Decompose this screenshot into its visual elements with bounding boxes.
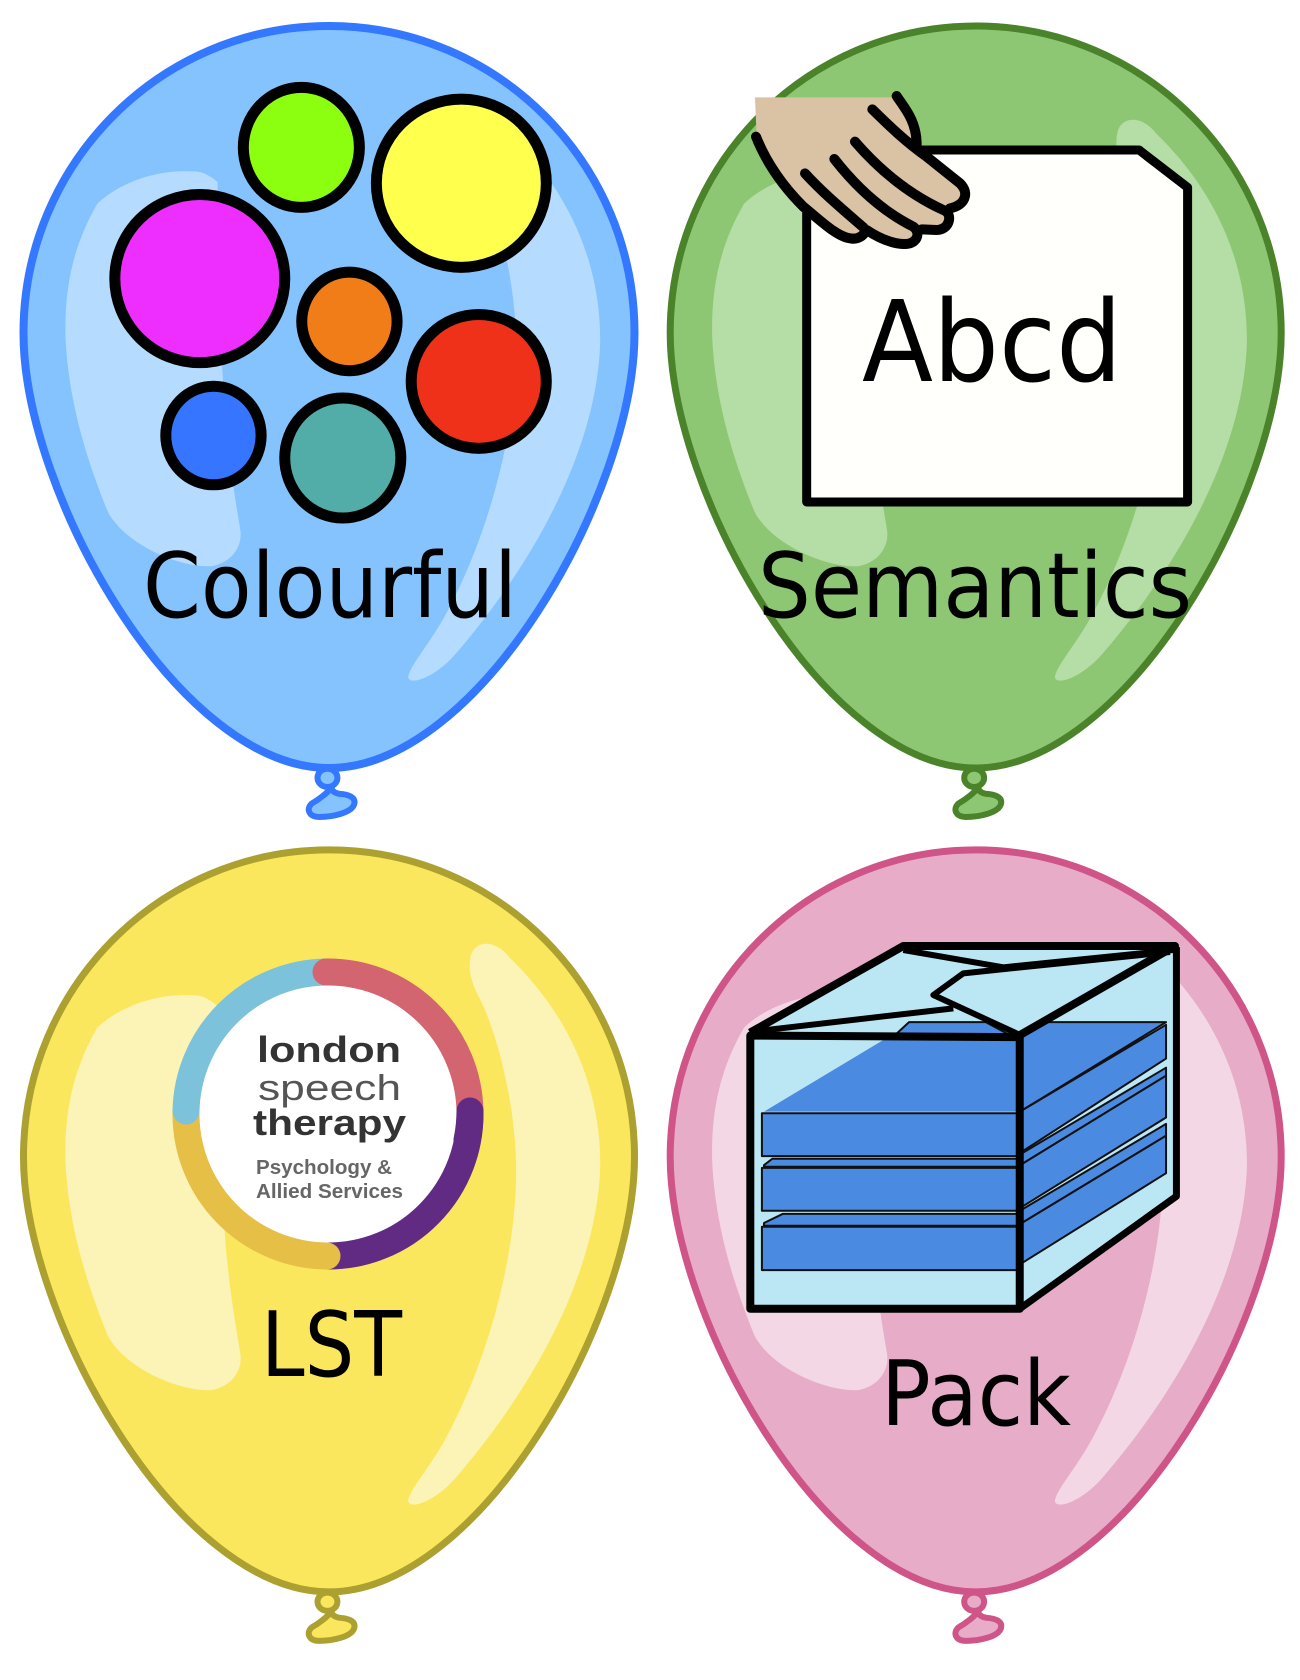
balloon: Colourful [24,26,634,817]
logo: london speech therapy: Allied Services [256,1181,403,1203]
balloon: Semantics [670,26,1281,817]
text on card: Abcd: Abcd [862,278,1122,408]
balloon: Pack [670,850,1281,1641]
label: Pack: Pack [881,1342,1071,1447]
icon: box of books [750,946,1176,1309]
balloon: LST [24,850,634,1641]
icon: coloured circles [115,87,546,518]
logo: london speech therapy: Psychology & [256,1157,392,1179]
balloon body yellow [24,850,634,1641]
label: Semantics: Semantics [758,534,1192,639]
icon: word card [807,150,1188,502]
logo: london speech therapy: therapy [253,1102,406,1143]
label: Colourful: Colourful [143,534,517,639]
logo: london speech therapy: speech [258,1067,401,1108]
balloon body pink [670,850,1281,1641]
icon: hand holding card [755,96,965,244]
logo: london speech therapy [186,972,470,1256]
logo: london speech therapy: london [257,1029,401,1070]
balloon body blue [24,26,634,817]
label: LST: LST [261,1293,403,1398]
balloon body green [670,26,1281,817]
